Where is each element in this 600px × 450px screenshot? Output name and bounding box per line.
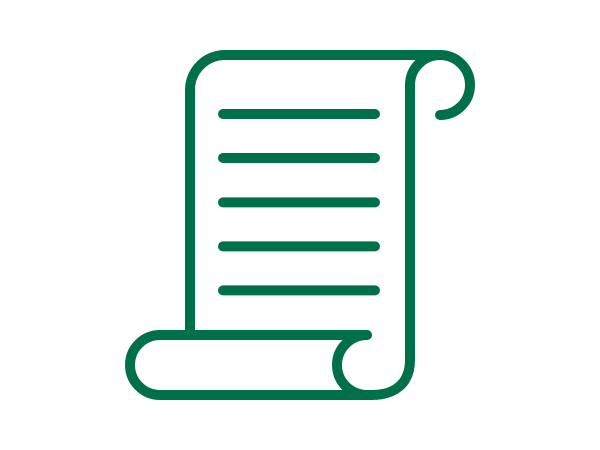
scroll sheet outline with top curl <box>190 55 470 395</box>
text lines <box>223 114 375 290</box>
bottom roll <box>130 335 372 395</box>
